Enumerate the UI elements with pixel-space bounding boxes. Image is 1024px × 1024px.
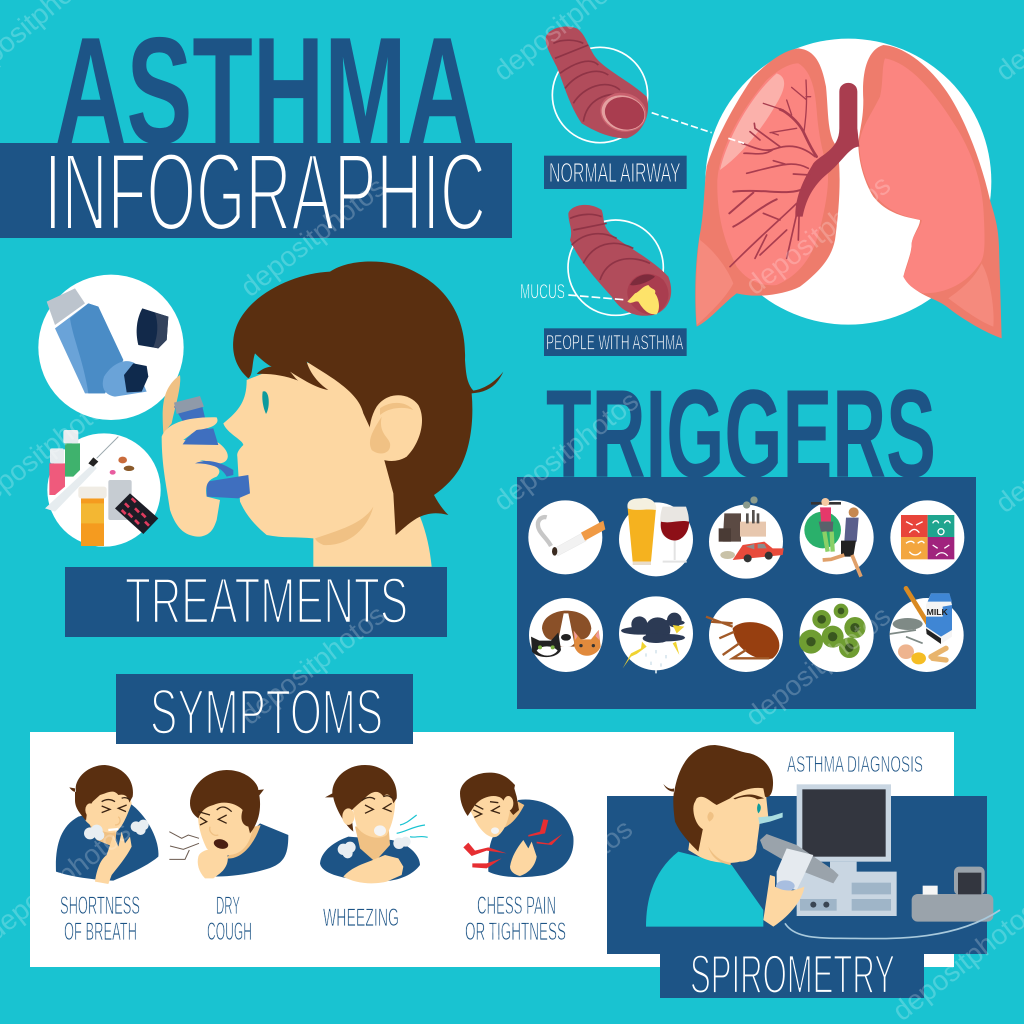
icon: asthma airway with mucus and label [520,205,687,356]
icon: exercise [800,498,874,577]
text: asthma diagnosis: ASTHMA DIAGNOSIS [787,751,923,777]
label: wheezing: WHEEZING [323,904,399,932]
figure: chest pain [460,773,574,877]
icon: cigarette [528,500,605,574]
icon: computer [797,784,897,916]
figure: dry cough [169,770,288,878]
watermarks: depositphotos [482,813,638,945]
label: shortness of breath: OF BREATH [64,918,137,946]
label [544,328,687,356]
hand and inhaler [162,375,250,537]
label: shortness of breath: SHORTNESS [60,892,140,920]
label: chess pain or tightness [465,892,566,946]
panel: triggers [517,477,976,709]
watermarks: depositphotos [740,169,896,301]
icon: inhaler [38,275,184,420]
icon: medicines [45,430,161,547]
watermarks: depositphotos [235,171,391,303]
bronchial tree [729,80,859,267]
label: PEOPLE WITH ASTHMA [546,329,684,354]
label: shortness of breath [60,892,140,946]
mucus label: MUCUS [520,280,565,303]
watermarks: depositphotos [488,385,644,517]
icon: normal airway with label [544,26,744,189]
panel: spirometry [607,745,1000,1005]
figure: shortness of breath [56,765,158,884]
banner: spirometry [660,943,924,1005]
right lung [858,45,1002,338]
watermarks: depositphotos [235,599,391,731]
banner: treatments [65,564,447,637]
title: Asthma Infographic: ASTHMA [55,6,478,176]
icon: pollution [709,496,784,579]
panel: symptoms: COUGH [207,918,252,946]
watermarks: depositphotos [740,600,896,732]
icon: spirometer base [785,867,1000,939]
label: chess pain or tightness: CHESS PAIN [477,892,556,920]
panel: symptoms [30,674,954,967]
icon: alcohol [619,498,693,576]
title: Asthma Infographic [0,6,512,254]
icon: mold [799,598,874,672]
figure: wheezing [320,765,428,883]
icon: food allergens [889,588,964,672]
patient [646,745,783,927]
label: NORMAL AIRWAY [549,157,681,188]
title: Asthma Infographic: INFOGRAPHIC [44,131,486,254]
label: dry cough: DRY [216,892,240,920]
icon: pets [529,598,603,672]
panel: lungs diagram [695,39,1002,338]
icon: dust mite [706,598,783,672]
heading: symptoms [116,674,413,748]
banner: treatments: TREATMENTS [125,564,408,637]
icon: storm [619,596,693,673]
panel: treatments illustration [38,261,503,567]
left lung [695,48,840,327]
label [544,156,687,189]
icon: food allergens: MILK [927,607,949,617]
heading: symptoms: SYMPTOMS [150,676,383,748]
label: chess pain or tightness: OR TIGHTNESS [465,918,566,946]
icon: emotions [890,500,964,574]
label: dry cough [207,892,252,946]
person using inhaler [162,261,503,567]
icon: spirometer handset [760,834,839,927]
